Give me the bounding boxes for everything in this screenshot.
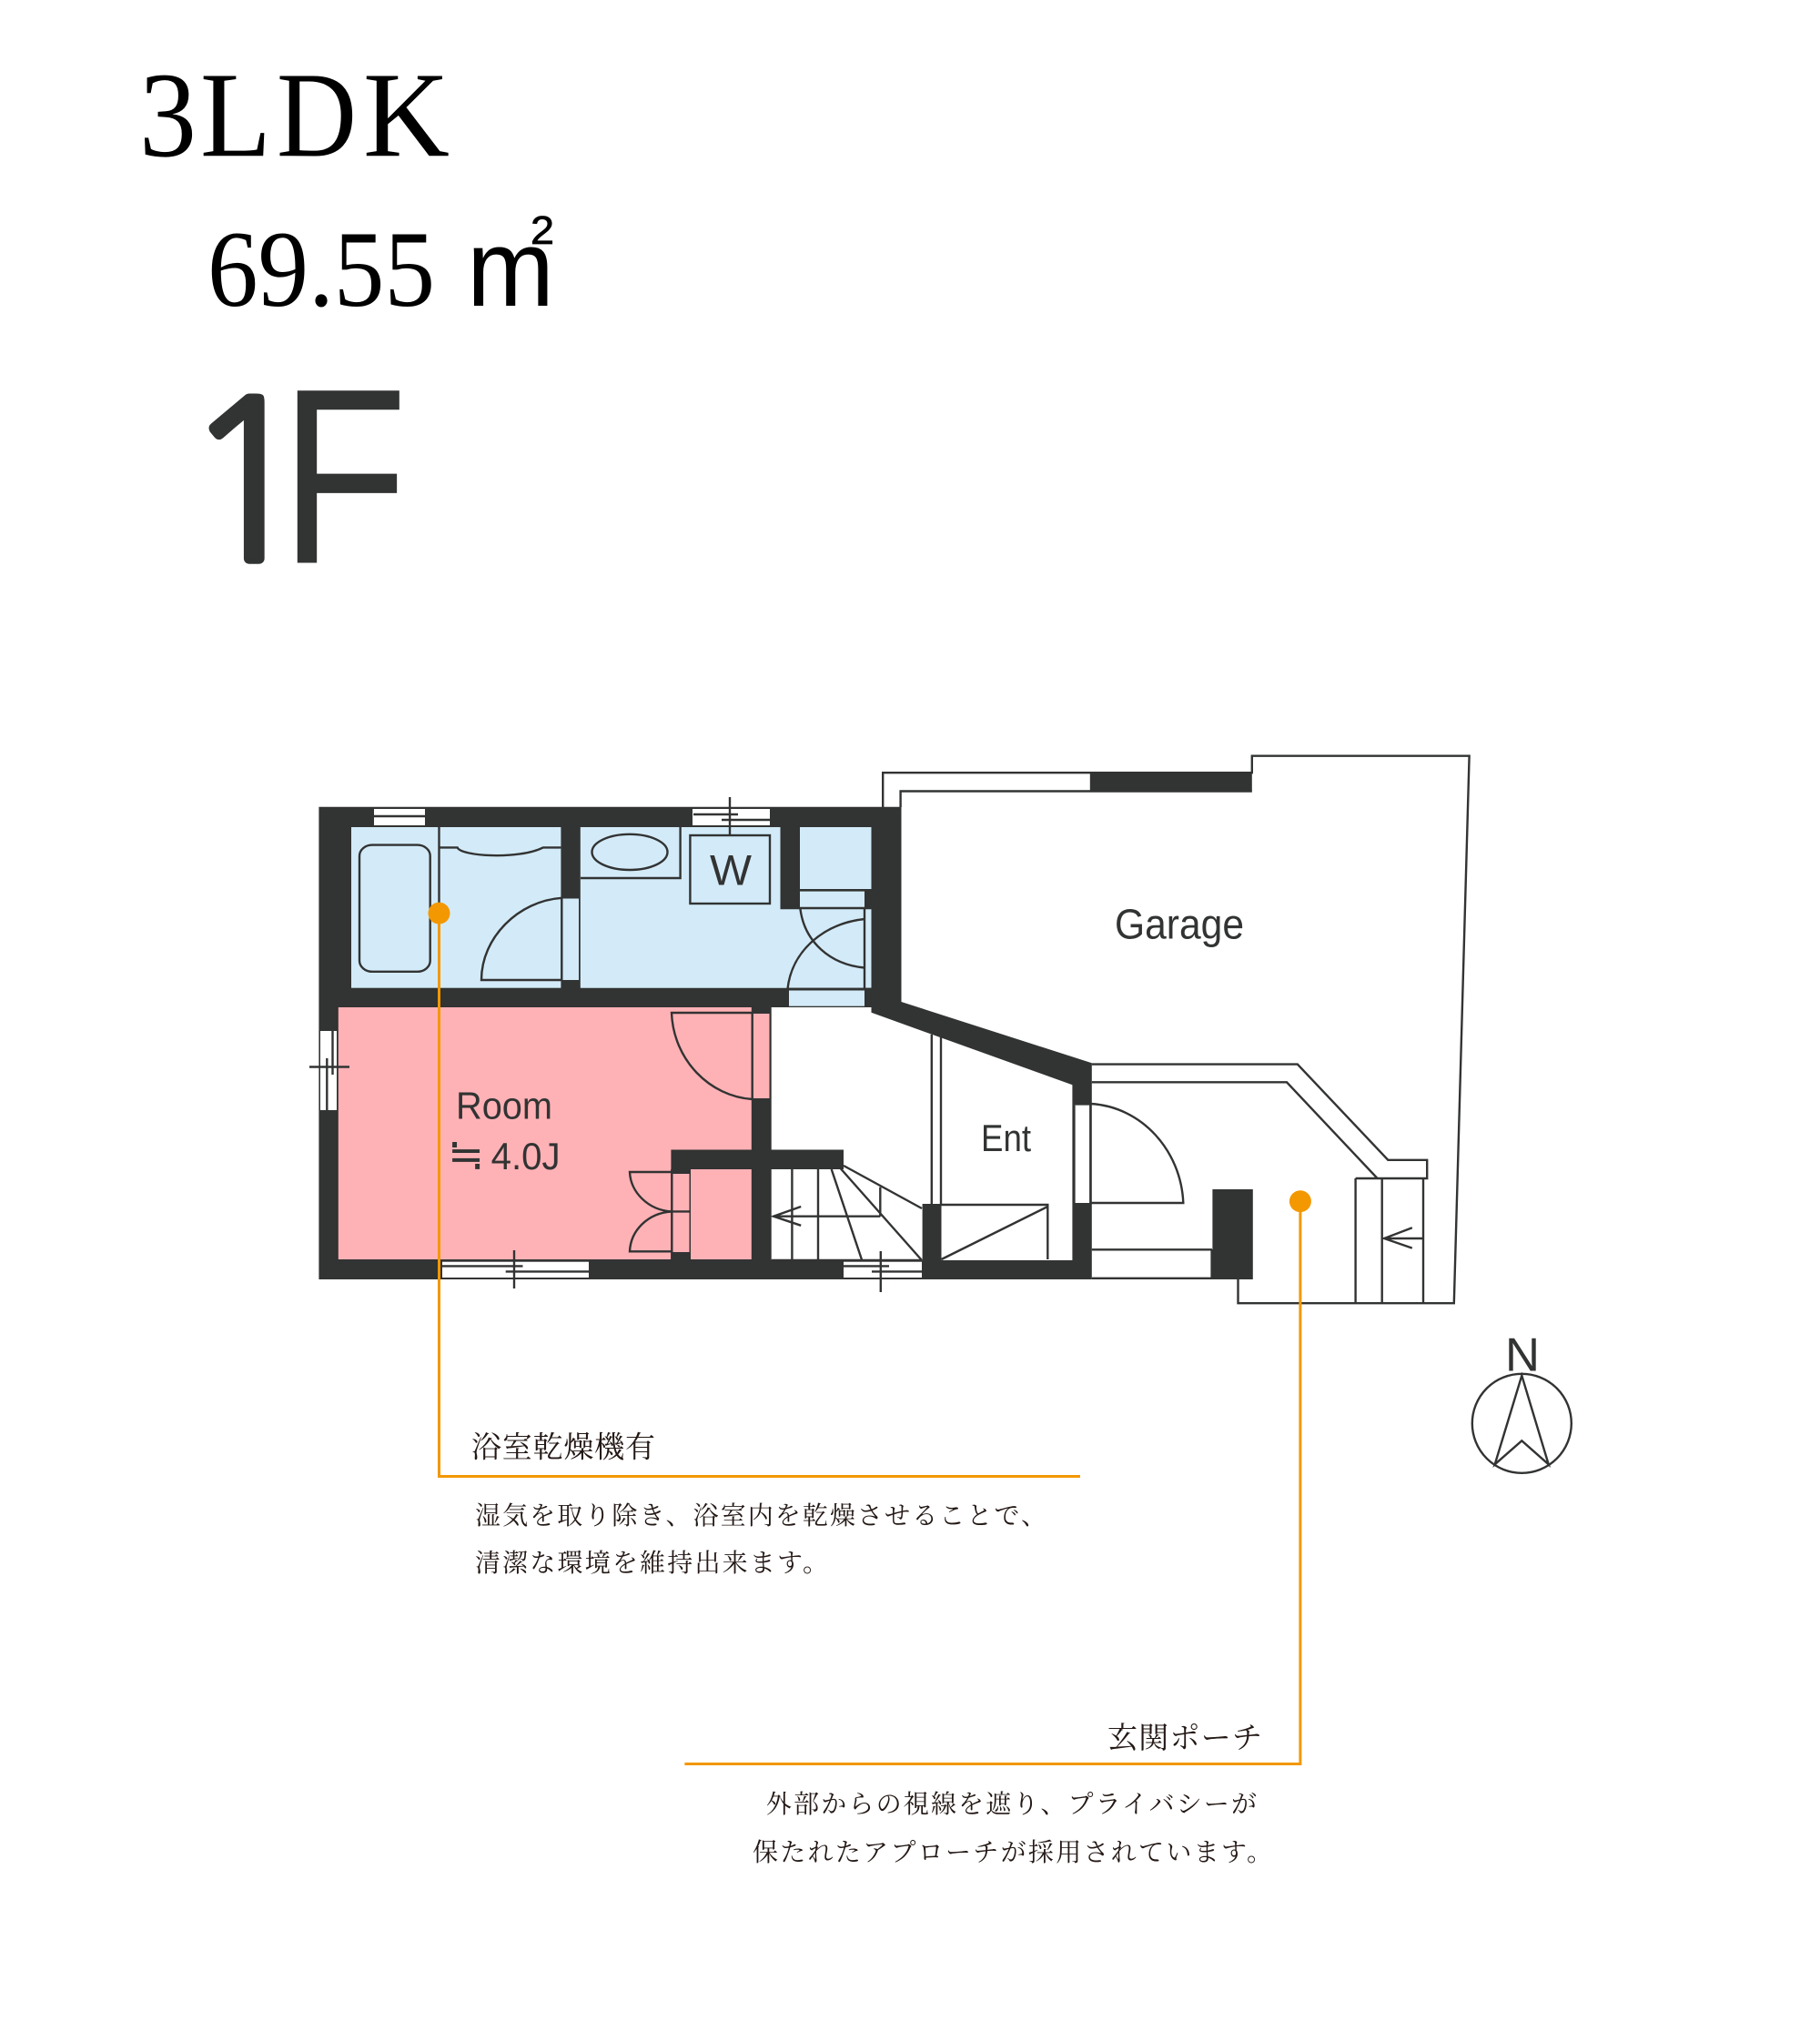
label: room size: 4.0J xyxy=(491,1135,561,1177)
title: 3LDK: K xyxy=(363,47,450,182)
callout: entrance porch xyxy=(684,1190,1311,1867)
hall xyxy=(772,1007,1072,1260)
title: 3LDK xyxy=(139,47,450,182)
washing machine: W xyxy=(710,846,753,894)
heading: floor 1F: F xyxy=(280,337,408,617)
window sashes xyxy=(309,797,922,1292)
callout body xyxy=(475,1501,1046,1578)
room: washroom xyxy=(581,827,872,988)
callout body: 外部からの視線を遮り、プライバシーが xyxy=(766,1790,1257,1819)
building walls xyxy=(318,807,1092,1279)
title: floor area: 2 xyxy=(531,208,554,253)
bathtub xyxy=(359,845,430,972)
callout body: 清潔な環境を維持出来ます。 xyxy=(475,1549,828,1578)
title: floor area: 69.55 xyxy=(207,208,435,329)
callout body: 湿気を取り除き、浴室内を乾燥させることで、 xyxy=(475,1501,1046,1531)
title: 3LDK: 3 xyxy=(139,47,197,182)
room: toilet xyxy=(800,827,872,889)
bath counter xyxy=(439,827,561,910)
room: bath xyxy=(351,827,561,988)
closet doors xyxy=(630,1169,691,1259)
bath door xyxy=(481,898,561,980)
washing machine xyxy=(690,835,770,904)
washbasin xyxy=(581,827,681,878)
leader line xyxy=(684,1201,1300,1763)
label: Ent: Ent xyxy=(981,1116,1031,1159)
shoe cupboard xyxy=(941,1205,1047,1259)
entrance door xyxy=(1090,1104,1183,1203)
garage wall xyxy=(1090,773,1252,792)
title: 3LDK: D xyxy=(277,47,357,182)
entrance pier xyxy=(1210,1189,1253,1279)
stairs xyxy=(772,1166,922,1260)
heading: floor 1F: 1 xyxy=(180,371,314,592)
door strips xyxy=(562,892,1090,1252)
floor plan xyxy=(309,756,1470,1303)
room door xyxy=(672,1013,753,1099)
toilet doors xyxy=(781,908,872,989)
callout heading: 浴室乾燥機有 xyxy=(471,1430,655,1465)
title: 3LDK: L xyxy=(200,47,271,182)
label: room size: ≒ xyxy=(448,1129,484,1180)
label: Room: Room xyxy=(456,1085,552,1127)
porch stair arrow xyxy=(1384,1228,1423,1248)
heading: floor 1F xyxy=(180,337,408,617)
callout body xyxy=(753,1790,1272,1867)
callout: bath dryer xyxy=(428,903,1080,1578)
room: closet xyxy=(691,1169,752,1259)
marker xyxy=(428,903,450,925)
title: floor area: m xyxy=(467,207,554,329)
label: room size xyxy=(448,1129,561,1180)
callout heading: 玄関ポーチ xyxy=(1107,1722,1262,1755)
north compass: N xyxy=(1505,1329,1540,1382)
garage and porch outline xyxy=(883,756,1470,1303)
marker xyxy=(1289,1190,1311,1212)
hall partition xyxy=(932,1035,941,1204)
windows xyxy=(320,809,922,1278)
label: Garage: Garage xyxy=(1115,901,1244,948)
room: bedroom xyxy=(339,1007,752,1259)
callout body: 保たれたアプローチが採用されています。 xyxy=(753,1838,1272,1867)
north compass xyxy=(1472,1329,1572,1473)
leader line xyxy=(439,914,1080,1476)
